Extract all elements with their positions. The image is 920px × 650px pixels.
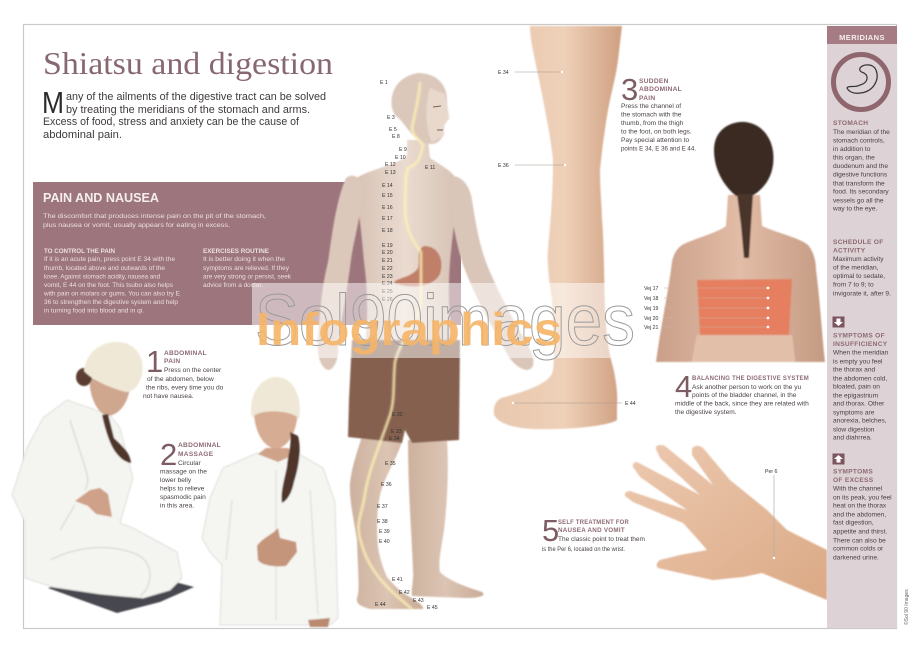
standing hat <box>251 377 300 420</box>
sidebar: stomach text: duodenum and the <box>833 163 888 170</box>
sidebar: excess: There can also be <box>833 538 886 544</box>
step 5: NAUSEA AND VOMIT <box>558 527 625 534</box>
man: point labels: E 15 <box>382 193 393 199</box>
column: to control the pain: in turning food into blood and in qi. <box>44 308 144 314</box>
step 2: spasmodic pain <box>160 494 206 501</box>
leg callouts: E 44 <box>625 401 636 407</box>
sidebar: excess <box>833 468 892 562</box>
sidebar: insufficiency: the abdomen cold, <box>833 376 887 382</box>
sidebar: insufficiency: symptoms are <box>833 410 875 416</box>
man: point labels: E 3 <box>387 115 395 121</box>
man: point labels: E 8 <box>392 134 400 140</box>
hair <box>714 122 773 196</box>
sidebar: insufficiency: slow digestion <box>833 426 875 434</box>
step 3: points E 34, E 36 and E 44. <box>621 146 696 152</box>
step 2: MASSAGE <box>178 451 214 458</box>
column: to control the pain: knee. Against stomach acidity, nausea and <box>44 274 160 280</box>
man: point labels: E 26 <box>382 297 393 303</box>
leg callouts: E 34 <box>498 70 509 76</box>
step 2: massage on the <box>160 468 207 476</box>
back points <box>644 286 769 331</box>
man: point labels: E 22 <box>382 266 393 272</box>
figure: hand <box>625 445 827 600</box>
sidebar: stomach text: digestive functions <box>833 172 888 178</box>
panel intro: plus nausea or vomit, usually appears for eating in excess. <box>43 222 230 229</box>
step 2: lower belly <box>160 477 192 484</box>
standing braid <box>282 432 300 503</box>
step 5: The classic point to treat them <box>558 536 645 543</box>
man: point labels: E 19 <box>382 243 393 249</box>
sidebar: schedule: invigorate it, after 9. <box>833 290 891 298</box>
man: point labels: E 34 <box>389 436 400 442</box>
figure: standing woman <box>202 377 338 627</box>
man: point labels: E 21 <box>382 258 393 264</box>
column: to control the pain: 36 to strengthen the digestive system and help <box>44 299 178 306</box>
column: to control the pain: If it is an acute pain, press point E 34 with the <box>44 256 175 263</box>
man: point labels: E 18 <box>382 228 393 234</box>
watermark: Infographics <box>256 303 562 355</box>
back points: Vej 19 <box>644 306 659 312</box>
step 2: Circular <box>178 460 202 467</box>
column: to control the pain: vomit, E 44 on the foot. This tsubo also helps <box>44 282 173 289</box>
column: exercises routine: advice from a doctor. <box>203 282 263 289</box>
man: left leg <box>350 436 423 609</box>
step 3 <box>621 72 696 152</box>
man: point labels: E 32 <box>392 412 403 418</box>
man: point labels: E 45 <box>427 605 438 611</box>
man: point labels: E 13 <box>385 170 396 176</box>
standing head <box>254 402 298 449</box>
back points: Vej 18 <box>644 296 659 302</box>
sidebar: stomach text: this organ, the <box>833 154 875 162</box>
sidebar: meridians: MERIDIANS <box>839 33 885 42</box>
sidebar: schedule <box>833 239 891 298</box>
man: point labels: E 38 <box>377 519 388 525</box>
column: exercises routine: are very strong or persist, seek <box>203 274 292 280</box>
sidebar: schedule: optimal to sedate, <box>833 273 885 280</box>
man: meridian line <box>358 82 423 609</box>
sidebar header <box>827 26 897 44</box>
kneeling mat <box>48 582 194 613</box>
step 3: ABDOMINAL <box>639 86 682 93</box>
back points: Vej 20 <box>644 316 659 322</box>
back skin <box>656 195 825 362</box>
sidebar: stomach text: in addition to <box>833 146 871 153</box>
step 1: not have nausea. <box>143 393 194 400</box>
standing lower hand <box>308 618 330 627</box>
man: stomach organ <box>394 246 441 286</box>
step 2 <box>160 437 221 510</box>
step 1: ABDOMINAL <box>164 350 207 357</box>
credit: ©Sol 90 Images <box>903 589 910 625</box>
step 2: helps to relieve <box>160 486 205 492</box>
man: point labels: E 1 <box>380 80 388 86</box>
intro text: Excess of food, stress and anxiety can be the cause of <box>43 116 300 128</box>
column: exercises routine: It is better doing it when the <box>203 256 285 263</box>
sidebar: stomach text <box>832 120 890 212</box>
hand callout: Per 6 <box>765 469 778 475</box>
kneeling hands <box>75 488 112 517</box>
step 3: PAIN <box>639 95 655 102</box>
sidebar: insufficiency: and diahrrea. <box>833 434 872 442</box>
panel: pain and nausea <box>33 182 461 325</box>
sidebar: schedule: Maximum activity <box>833 256 884 263</box>
step 4: the digestive system. <box>675 409 737 416</box>
intro text: by treating the meridians of the stomach and arms. <box>66 104 310 116</box>
step 4: BALANCING THE DIGESTIVE SYSTEM <box>692 375 809 382</box>
man: point labels: E 44 <box>375 602 386 608</box>
braid <box>737 194 753 258</box>
man: point labels: E 11 <box>425 165 435 171</box>
man: point labels: E 42 <box>399 590 410 596</box>
man: point labels: E 43 <box>413 598 424 604</box>
sidebar: stomach text: The meridian of the <box>833 129 890 136</box>
man: point labels: E 36 <box>381 482 392 488</box>
sidebar: excess: appetite and thirst. <box>833 528 887 536</box>
sidebar: excess: darkened urine. <box>833 554 879 562</box>
sidebar: excess: and the abdomen, <box>833 512 886 518</box>
icon: stomach <box>834 54 888 110</box>
step 3: the stomach with the <box>621 112 682 118</box>
figure: standing man with stomach meridian <box>317 73 534 611</box>
sidebar: stomach text: way to the eye. <box>832 206 878 212</box>
sidebar: insufficiency: the epigastrium <box>833 392 879 400</box>
sidebar: insufficiency: When the meridian <box>833 350 889 356</box>
title: Shiatsu and digestion <box>43 45 333 81</box>
man: point labels: E 33 <box>391 429 402 435</box>
man: point labels: E 39 <box>379 529 390 535</box>
kneeling hair bun <box>76 368 92 386</box>
sidebar: stomach text: stomach controls, <box>833 138 885 144</box>
step 1 <box>143 344 224 400</box>
sidebar: excess: fast digestion, <box>833 520 874 526</box>
step 4: 4 <box>675 369 692 404</box>
intro text: abdominal pain. <box>43 129 122 141</box>
sidebar: insufficiency: bloated, pain on <box>833 384 880 390</box>
man: eyes and mouth <box>433 106 443 130</box>
kneeling hat <box>84 342 143 392</box>
man: point labels: E 5 <box>389 127 397 133</box>
man: point labels: E 9 <box>399 147 407 153</box>
figure: woman's back with braid <box>656 122 825 362</box>
step 1: Press on the center <box>164 367 222 374</box>
man: point labels: E 14 <box>382 183 393 189</box>
orange top <box>697 279 792 335</box>
panel intro: The discomfort that produces intense pain on the pit of the stomach, <box>43 213 266 220</box>
sidebar: insufficiency: and thorax. Other <box>833 400 885 408</box>
step 2: ABDOMINAL <box>178 442 221 449</box>
column: exercises routine: EXERCISES ROUTINE <box>203 248 270 255</box>
man: point labels: E 35 <box>385 461 396 467</box>
column: exercises routine <box>203 248 292 289</box>
kneeling robe <box>12 400 182 598</box>
man: right leg <box>408 440 483 598</box>
kneeling head <box>90 378 130 416</box>
heading: pain and nausea: PAIN AND NAUSEA <box>43 191 159 205</box>
back points: Vej 21 <box>644 325 659 331</box>
man: point labels: E 16 <box>382 205 393 211</box>
sidebar: excess: on its peak, you feel <box>833 494 892 502</box>
step 5: is the Per 6, located on the wrist. <box>542 546 625 553</box>
kneeling braid <box>102 414 131 463</box>
kneeling robe folds <box>50 420 150 596</box>
intro text: any of the ailments of the digestive tract can be solved <box>66 91 326 103</box>
sidebar: insufficiency: SYMPTOMS OF <box>833 332 885 340</box>
man: left arm <box>317 176 362 370</box>
sidebar: schedule: SCHEDULE OF <box>833 239 884 246</box>
sidebar: stomach text: food. Its secondary <box>833 188 889 196</box>
column: to control the pain: with pain on molars or gums. You can also try E <box>43 290 180 298</box>
sidebar: schedule: from 7 to 9; to <box>833 282 874 288</box>
standing robe <box>202 453 338 625</box>
column: to control the pain: TO CONTROL THE PAIN <box>44 248 115 255</box>
sidebar: schedule: of the meridian, <box>833 264 879 272</box>
man: torso <box>352 140 458 345</box>
step 1: PAIN <box>164 358 180 365</box>
intro text: M <box>42 85 64 120</box>
man: right arm <box>451 176 534 370</box>
column: to control the pain <box>43 248 180 314</box>
standing hands <box>257 528 297 566</box>
step 4: Ask another person to work on the yu <box>692 384 802 391</box>
sidebar: meridians <box>827 26 897 628</box>
sidebar: excess: heat on the thorax <box>833 502 887 510</box>
leg callouts: E 36 <box>498 163 509 169</box>
sidebar: insufficiency: the thorax and <box>833 366 875 374</box>
sidebar: excess: SYMPTOMS <box>833 468 873 476</box>
man: point labels: E 41 <box>392 577 403 583</box>
man: point labels: E 25 <box>382 289 393 295</box>
sidebar: stomach text: vessels go all the <box>833 198 884 204</box>
sidebar: stomach text: that transform the <box>833 180 885 188</box>
step 3: 3 <box>621 72 638 107</box>
step 5: 5 <box>542 513 559 548</box>
step 3: SUDDEN <box>639 78 669 85</box>
hand callout <box>765 469 778 559</box>
watermark: Sol90images <box>255 281 635 361</box>
sidebar: excess: common colds or <box>833 546 884 552</box>
leg callouts <box>498 70 636 407</box>
step 3: thumb, from the thigh <box>621 120 684 127</box>
sidebar: insufficiency <box>833 332 889 442</box>
figure: kneeling woman <box>12 342 194 613</box>
sidebar: stomach text: STOMACH <box>833 120 868 127</box>
step 1: the ribs, every time you do <box>146 384 224 392</box>
panel intro <box>43 213 266 229</box>
step 3: to the foot, on both legs. <box>621 128 692 136</box>
icon: up arrow <box>832 454 844 464</box>
intro text <box>42 85 326 141</box>
sidebar: excess: OF EXCESS <box>833 477 874 484</box>
step 3: Press the channel of <box>621 103 681 110</box>
man: point labels: E 24 <box>382 281 393 287</box>
step 1: 1 <box>146 344 163 379</box>
step 3: Pay special attention to <box>621 137 690 144</box>
sidebar: insufficiency: is empty you feel <box>833 358 883 366</box>
step 4 <box>675 369 809 416</box>
lower back <box>692 335 795 362</box>
sidebar: excess: With the channel <box>833 486 883 492</box>
man: point labels <box>375 80 438 611</box>
step 2: 2 <box>160 437 177 472</box>
sidebar: insufficiency: anorexia, belches, <box>833 418 887 424</box>
column: to control the pain: thumb, located above and outwards of the <box>44 265 165 272</box>
man: point labels: E 23 <box>382 274 393 280</box>
figure: large leg <box>494 26 622 429</box>
standing robe folds <box>226 470 318 620</box>
man: point labels: E 12 <box>385 162 396 168</box>
man: point labels: E 20 <box>382 250 393 256</box>
man: head <box>391 73 449 144</box>
man: point labels: E 17 <box>382 216 393 222</box>
step 4: points of the bladder channel, in the <box>692 392 797 399</box>
step 2: in this area. <box>160 502 194 510</box>
man: point labels: E 10 <box>395 155 406 161</box>
man: shorts <box>348 340 460 443</box>
step 5: SELF TREATMENT FOR <box>558 519 629 526</box>
sidebar: insufficiency: INSUFFICIENCY <box>833 341 888 348</box>
step 4: middle of the back, since they are related with <box>675 400 809 408</box>
man: point labels: E 37 <box>377 504 388 510</box>
man: point labels: E 40 <box>379 539 390 545</box>
step 5 <box>542 513 645 553</box>
step 1: of the abdomen, below <box>147 376 214 383</box>
icon: down arrow <box>832 316 844 328</box>
sidebar: schedule: ACTIVITY <box>833 248 866 254</box>
back points: Vej 17 <box>644 286 659 292</box>
column: exercises routine: symptoms are relieved. If they <box>203 265 290 272</box>
